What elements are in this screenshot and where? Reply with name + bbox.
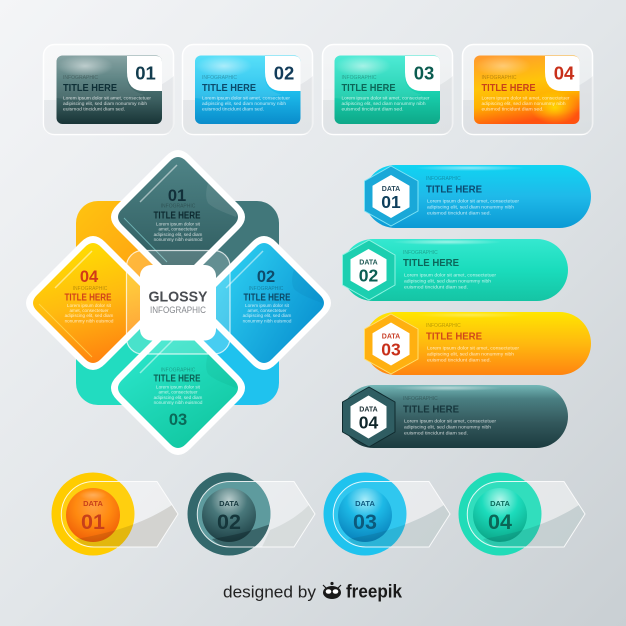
card text 03: [342, 75, 430, 112]
diamond 01: TITLE HERE: [154, 210, 201, 222]
card text 01: euismod tincidunt diam sed.: [63, 106, 125, 112]
glass arrow tag 02: [197, 482, 315, 547]
hexagon badge 02: DATA: [359, 260, 378, 266]
card text 04: TITLE HERE: [482, 83, 536, 94]
pill text 03: euismod tincidunt diam sed.: [427, 358, 491, 362]
badge: circle 03: DATA: [355, 499, 375, 508]
number tab 04: [545, 56, 580, 91]
panel: top card 04: [462, 44, 593, 134]
card text 04: Lorem ipsum dolor sit amet, consectetuer: [482, 96, 570, 100]
pill text 02: [403, 250, 497, 290]
card text 01: [63, 75, 151, 112]
number 04: 04: [554, 62, 575, 84]
pill text 02: Lorem ipsum dolor sit amet, consectetuer: [404, 272, 497, 278]
badge: circle 01: 01: [81, 510, 105, 534]
diamond 03: 03: [169, 411, 187, 429]
card text 03: INFOGRAPHIC: [342, 75, 377, 81]
pill text 04: euismod tincidunt diam sed.: [404, 430, 468, 436]
card text 02: euismod tincidunt diam sed.: [202, 106, 264, 112]
badge: circle 04: 04: [488, 510, 512, 534]
diamond 02: nonummy nibh euismod: [243, 318, 292, 323]
hexagon badge 01: 01: [381, 192, 401, 212]
badge: circle 02: 02: [217, 510, 241, 534]
badge: circle 02: DATA: [219, 499, 239, 508]
number 02: 02: [274, 62, 294, 84]
pill text 01: [426, 176, 520, 216]
card text 01: Lorem ipsum dolor sit amet, consectetuer: [63, 96, 151, 100]
panel: data pill 02: [342, 239, 568, 301]
glass arrow tag 01: [61, 482, 178, 547]
diamond 04: amet, consectetuer: [69, 308, 109, 313]
hexagon badge 03: 03: [381, 340, 401, 360]
badge: circle 02: [188, 472, 315, 556]
badge: circle 01: [52, 472, 178, 556]
diamond 04: [26, 236, 160, 370]
hexagon badge 03: DATA: [382, 334, 400, 340]
panel: data pill 01: [364, 165, 591, 228]
pill text 04: Lorem ipsum dolor sit amet, consectetuer: [404, 418, 497, 424]
card text 02: adipiscing elit, sed diam nonummy nibh: [202, 101, 286, 106]
diamond 03: adipiscing elit, sed diam: [154, 395, 203, 400]
diamond 01: amet, consectetuer: [158, 227, 198, 232]
diamond 04: adipiscing elit, sed diam: [65, 313, 114, 318]
card text 03: Lorem ipsum dolor sit amet, consectetuer: [342, 96, 430, 100]
diamond 01: Lorem ipsum dolor sit: [156, 222, 201, 226]
pill text 01: adipiscing elit, sed diam nonummy nibh: [427, 204, 514, 210]
diamond 04: 04: [80, 268, 99, 286]
diamond 04: TITLE HERE: [64, 292, 112, 304]
centre label: [140, 265, 216, 340]
backing square quadrants: [76, 201, 279, 405]
number 03: 03: [414, 62, 434, 84]
hexagon badge 04: [342, 387, 395, 447]
diamond 01: 01: [168, 187, 186, 205]
diamond 03: nonummy nibh euismod: [154, 400, 203, 405]
card text 01: TITLE HERE: [63, 83, 117, 94]
panel: top card 03: [322, 44, 453, 134]
hexagon badge 01: DATA: [382, 186, 400, 193]
pill text 03: TITLE HERE: [426, 332, 482, 342]
card text 03: TITLE HERE: [342, 83, 396, 94]
card text 04: INFOGRAPHIC: [482, 75, 517, 81]
pill text 04: TITLE HERE: [403, 404, 459, 416]
footer credit: [223, 582, 403, 602]
pill text 02: adipiscing elit, sed diam nonummy nibh: [404, 278, 491, 284]
pill text 01: Lorem ipsum dolor sit amet, consectetuer: [427, 198, 520, 204]
number tab 03: [405, 56, 440, 91]
diamond 02: [197, 236, 331, 370]
hexagon badge 01: [364, 166, 418, 226]
card text 02: Lorem ipsum dolor sit amet, consectetuer: [202, 96, 290, 100]
badge: circle 04: [458, 472, 585, 556]
hexagon badge 04: 04: [359, 412, 378, 432]
pill text 01: TITLE HERE: [426, 184, 482, 196]
card text 02: TITLE HERE: [202, 83, 256, 94]
icon: freepik logo: [323, 582, 341, 599]
panel: data pill 03: [364, 312, 591, 375]
hexagon badge 02: 02: [359, 266, 378, 286]
pill text 01: euismod tincidunt diam sed.: [427, 210, 491, 216]
diamond 02: TITLE HERE: [244, 292, 291, 304]
card text 04: adipiscing elit, sed diam nonummy nibh: [482, 101, 566, 106]
badge: circle 01: DATA: [83, 499, 103, 508]
pill text 02: euismod tincidunt diam sed.: [404, 284, 468, 290]
diamond 03: Lorem ipsum dolor sit: [156, 384, 201, 390]
diamond 04: nonummy nibh euismod: [65, 318, 114, 323]
footer credit: designed by: [223, 582, 317, 602]
pill text 03: Lorem ipsum dolor sit amet, consectetuer: [427, 346, 520, 350]
diamond 04: Lorem ipsum dolor sit: [67, 303, 112, 308]
diamond 01: INFOGRAPHIC: [161, 204, 196, 210]
diamond 02: adipiscing elit, sed diam: [243, 313, 292, 318]
hexagon badge 04: DATA: [359, 406, 378, 414]
centre glass square: [126, 250, 230, 354]
number tab 02: [265, 56, 300, 91]
pill text 04: [403, 396, 497, 436]
pill text 01: INFOGRAPHIC: [426, 176, 461, 182]
diamond 01: adipiscing elit, sed diam: [154, 232, 203, 237]
pill text 02: INFOGRAPHIC: [403, 250, 438, 256]
centre label: GLOSSY: [148, 288, 208, 306]
pill text 03: [426, 323, 520, 362]
card text 03: adipiscing elit, sed diam nonummy nibh: [342, 101, 426, 106]
diamond 04: INFOGRAPHIC: [73, 286, 108, 292]
panel: top card 02: [182, 44, 313, 134]
number tab 01: [127, 56, 162, 91]
diamond 01: [111, 150, 245, 284]
card text 02: [202, 75, 290, 112]
panel: data pill 04: [342, 385, 568, 448]
diamond 02: Lorem ipsum dolor sit: [245, 303, 290, 308]
card text 01: INFOGRAPHIC: [63, 75, 98, 81]
footer credit: freepik: [346, 582, 403, 602]
card text 02: INFOGRAPHIC: [202, 75, 237, 81]
glass arrow tag 04: [467, 482, 585, 547]
badge: circle 03: [324, 472, 450, 556]
number 01: 01: [135, 62, 156, 84]
badge: circle 04: DATA: [490, 499, 510, 508]
panel: top card 01: [44, 44, 174, 134]
diamond 03: TITLE HERE: [154, 374, 201, 384]
glass arrow tag 03: [333, 482, 450, 547]
pill text 03: adipiscing elit, sed diam nonummy nibh: [427, 352, 514, 356]
pill text 04: INFOGRAPHIC: [403, 396, 438, 402]
diamond 02: 02: [257, 268, 275, 286]
pill text 04: adipiscing elit, sed diam nonummy nibh: [404, 424, 491, 430]
diamond 03: amet, consectetuer: [158, 390, 198, 395]
diamond 03: INFOGRAPHIC: [161, 368, 196, 374]
card text 04: [482, 75, 570, 112]
diagram: glossy diamonds: [26, 150, 331, 455]
pill text 03: INFOGRAPHIC: [426, 323, 461, 329]
card text 01: adipiscing elit, sed diam nonummy nibh: [63, 101, 147, 106]
badge: circle 03: 03: [353, 510, 377, 534]
diamond 02: amet, consectetuer: [247, 308, 287, 313]
hexagon badge 03: [364, 314, 418, 374]
hexagon badge 02: [342, 240, 395, 300]
pill text 02: TITLE HERE: [403, 258, 459, 269]
diamond 01: nonummy nibh euismod: [154, 237, 203, 242]
card text 04: euismod tincidunt diam sed.: [482, 106, 544, 112]
centre label: INFOGRAPHIC: [150, 305, 206, 315]
diamond 03: [111, 321, 245, 455]
card text 03: euismod tincidunt diam sed.: [342, 106, 404, 112]
diamond 02: INFOGRAPHIC: [249, 286, 284, 292]
